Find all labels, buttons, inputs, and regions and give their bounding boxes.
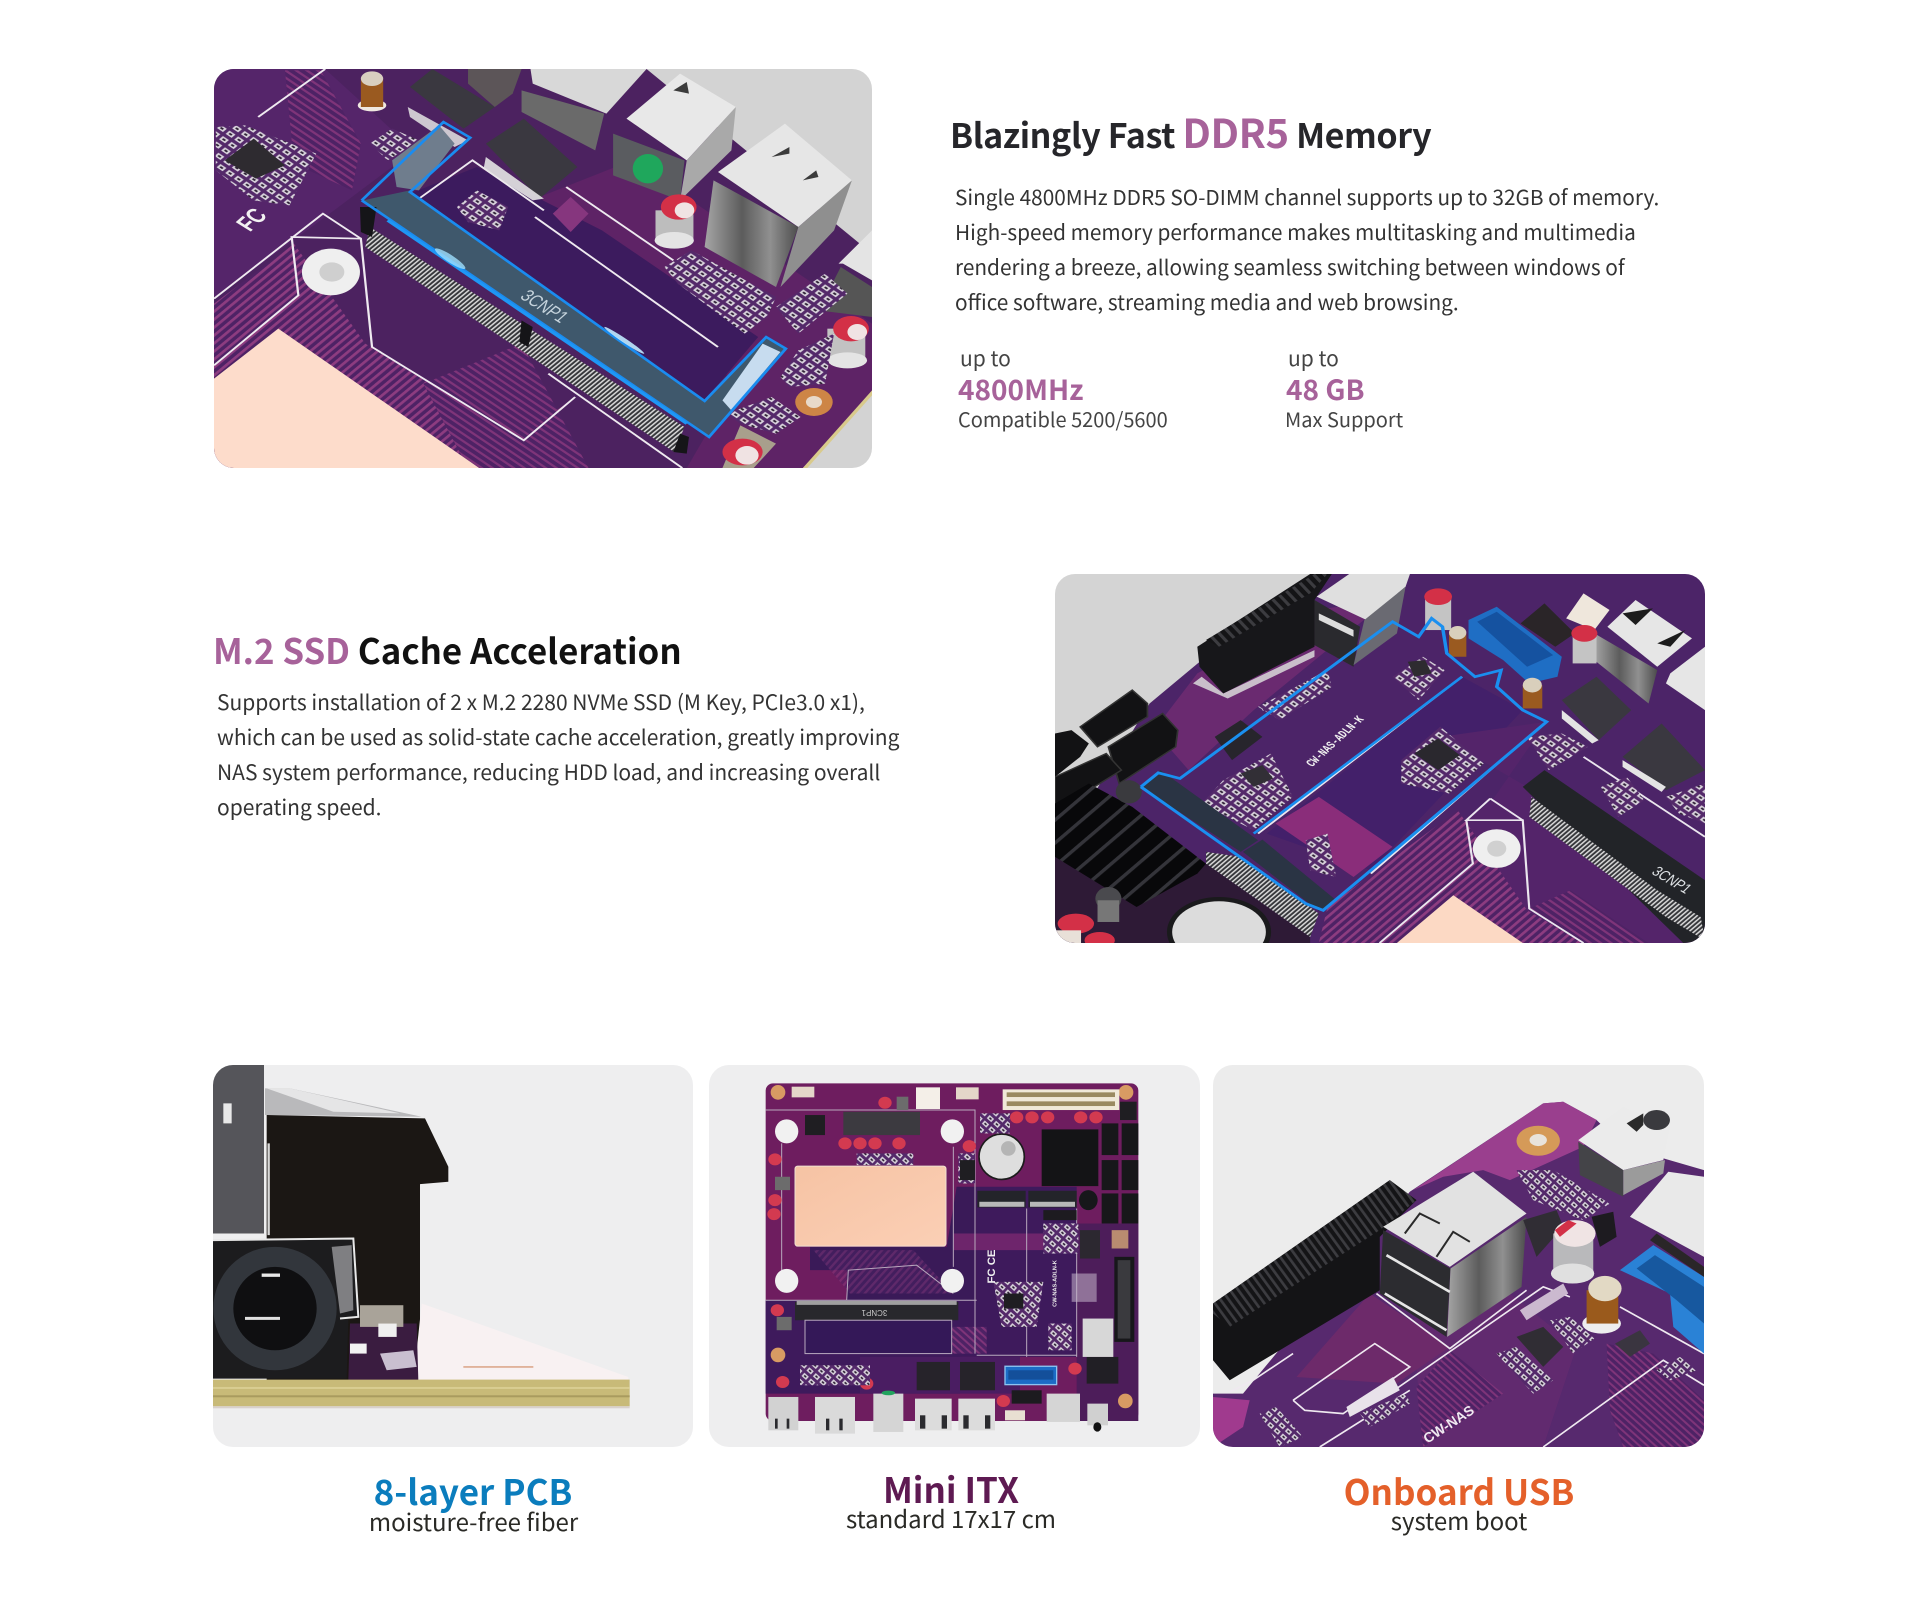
USB port stack (1380, 1172, 1527, 1337)
text block: DDR5 description (955, 180, 1659, 316)
power connectors (792, 1087, 1137, 1120)
image: DDR5 SO-DIMM slot on motherboard (214, 69, 872, 468)
caption: standard 17x17 cm: standard 17x17 cm (846, 1500, 1056, 1535)
right silver port (1630, 1172, 1704, 1257)
stat: 48 GB: up to (1288, 342, 1339, 372)
rear IO LAN magnetics and USB header (800, 1357, 1118, 1404)
PCIe slot (1193, 574, 1332, 698)
PCIe slot (1114, 1257, 1134, 1342)
text block: M.2 description (217, 687, 900, 822)
SO-DIMM slot: 3CNP1 (861, 1308, 887, 1317)
LAN transformers (358, 69, 577, 200)
capacitors (1055, 588, 1597, 949)
text block: M.2 description: which can be used as solid-state cache acceleration, greatly improving (217, 722, 899, 752)
silver ports (468, 69, 872, 317)
board model label: CW-NAS-ADLN-K (1304, 714, 1368, 770)
copper heat spreader (795, 1166, 946, 1246)
SO-DIMM slot: 3CNP1 (1648, 864, 1695, 897)
text block: DDR5 description: High-speed memory performance makes multitasking and multimedia (955, 216, 1636, 246)
text block: DDR5 description: office software, streaming media and web browsing. (955, 286, 1459, 316)
board marks: FC CE (986, 1249, 998, 1284)
SO-DIMM slot (795, 1301, 958, 1354)
heatsink (1055, 780, 1206, 922)
stat: 48 GB: 48 GB (1286, 368, 1365, 408)
heading: M.2 SSD: M.2 SSD Cache Acceleration (213, 625, 682, 675)
stat: 4800MHz: 4800MHz (958, 368, 1083, 408)
silver rear ports (768, 1319, 1113, 1434)
board silkscreen label: CW-NAS (1420, 1402, 1477, 1446)
icon: mounting hole (302, 249, 360, 295)
capacitors (655, 194, 869, 468)
text block: M.2 description: NAS system performance, reducing HDD load, and increasing overall (217, 757, 880, 787)
capacitors (1551, 1220, 1622, 1334)
card: Mini ITX board image (709, 1065, 1200, 1447)
gold ring (1517, 1126, 1560, 1156)
stat: 48 GB: Max Support (1285, 404, 1403, 432)
stat: 4800MHz: up to (960, 342, 1011, 372)
caption: Onboard USB: Onboard USB (1344, 1465, 1574, 1516)
SO-DIMM slot (1523, 770, 1705, 943)
stat: 4800MHz (958, 342, 1168, 432)
USB port (1314, 574, 1410, 667)
chipset heatsink (1042, 1129, 1098, 1186)
component clusters (960, 1113, 1128, 1350)
mounting holes (771, 1085, 1133, 1408)
caption: 8-layer PCB: 8-layer PCB (374, 1465, 572, 1516)
LAN ports (1594, 600, 1705, 710)
battery (979, 1134, 1024, 1179)
SATA connectors (1079, 1123, 1138, 1223)
text block: M.2 description: operating speed. (217, 792, 382, 822)
caption: moisture-free fiber: moisture-free fiber (369, 1503, 578, 1538)
coin cell battery (1167, 897, 1271, 967)
card: Onboard USB image (1213, 1065, 1704, 1447)
caption: Mini ITX: Mini ITX (883, 1463, 1019, 1514)
text block: M.2 description: Supports installation of 2 x M.2 2280 NVMe SSD (M Key, PCIe3.0 x1), (217, 687, 865, 717)
USB header (1620, 1233, 1704, 1354)
M.2 slots (977, 1191, 1077, 1207)
image: M.2 slots on motherboard (1055, 574, 1705, 943)
stat: 4800MHz: Compatible 5200/5600 (958, 404, 1168, 432)
stat: 48 GB (1285, 342, 1403, 432)
IC and surrounding components (216, 125, 589, 232)
caption: system boot: system boot (1391, 1502, 1527, 1537)
card: 8-layer PCB image (213, 1065, 693, 1447)
component clusters (1260, 1170, 1697, 1447)
VRM and capacitors (767, 1097, 1103, 1407)
SMD cluster (664, 250, 872, 468)
SATA connectors (1055, 690, 1178, 810)
M.2 connectors and blue highlight (1141, 618, 1547, 937)
slot label: 3CNP1 (516, 286, 574, 326)
text block: DDR5 description: Single 4800MHz DDR5 SO-DIMM channel supports up to 32GB of memory. (955, 180, 1659, 210)
board marks (986, 1249, 1059, 1307)
board marks: CW-NAS-ADLN-K (1053, 1259, 1059, 1307)
mounting hole (1473, 829, 1521, 868)
PCB detail components (1202, 657, 1705, 877)
heading: DDR5 memory: Blazingly Fast DDR5 Memory (950, 102, 1431, 160)
PCIe slot (1213, 1180, 1416, 1380)
USB header and pin header (1469, 593, 1610, 683)
audio jack (1578, 1107, 1670, 1197)
SO-DIMM slot with blue highlight (360, 122, 786, 454)
FCC marks: FC (230, 204, 273, 235)
text block: DDR5 description: rendering a breeze, allowing seamless switching between windows of (955, 251, 1625, 281)
